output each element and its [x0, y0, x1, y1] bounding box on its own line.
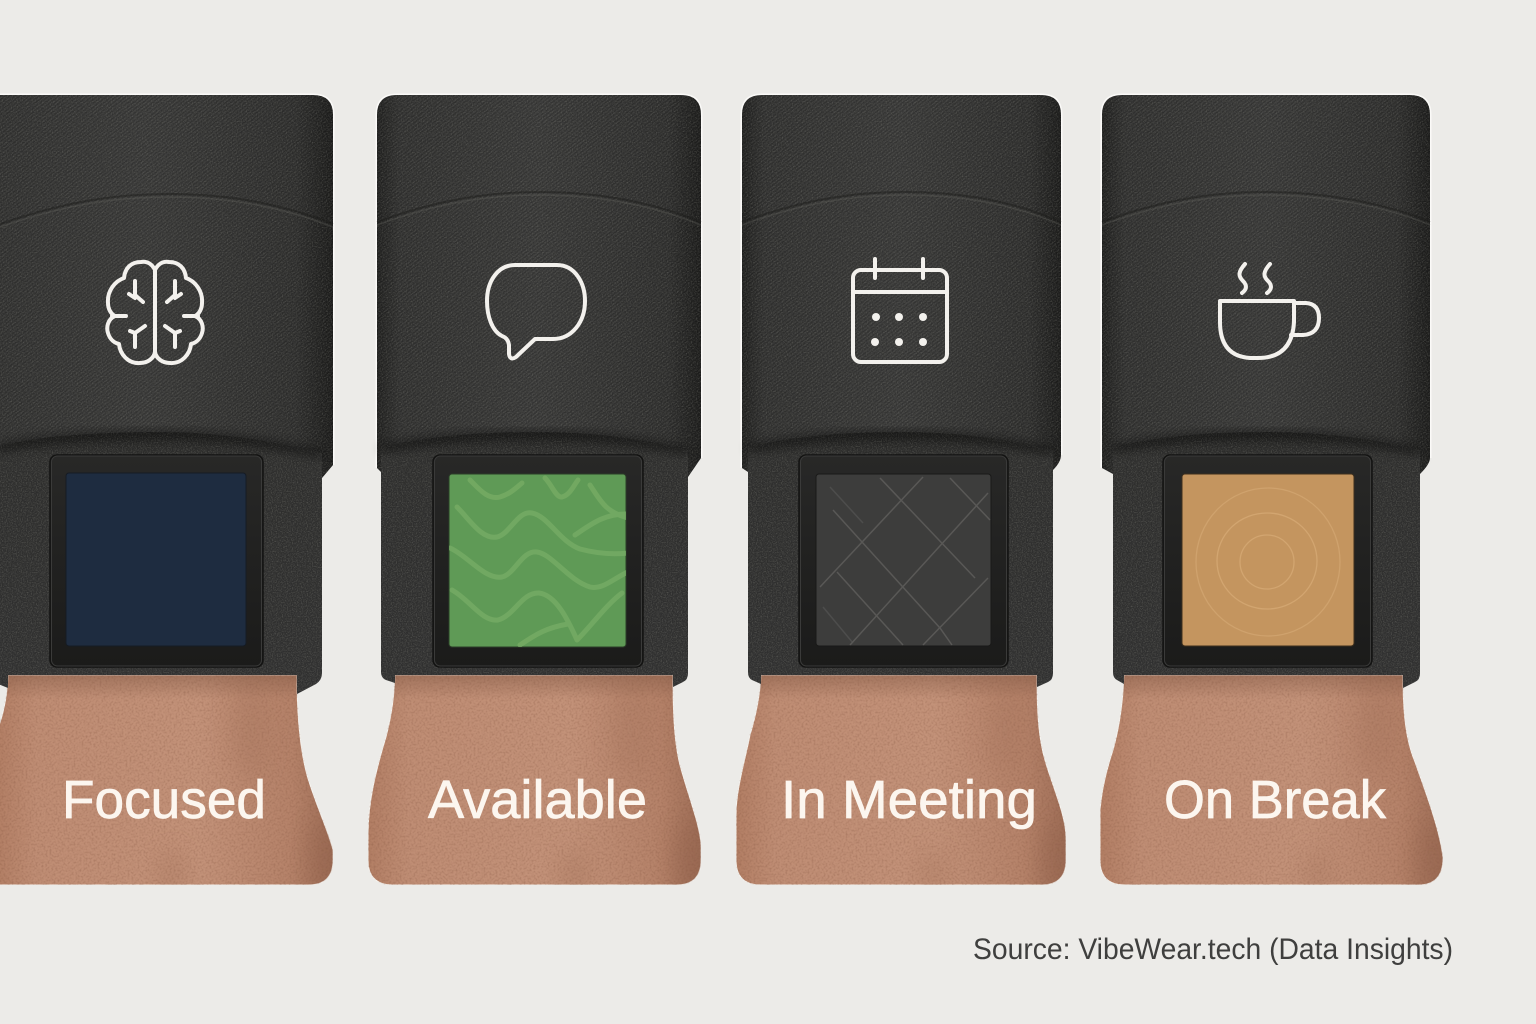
hand: available [368, 675, 708, 901]
label: On Break: On Break [1164, 770, 1387, 830]
screen: tan rings [1182, 474, 1354, 646]
panel: available [368, 95, 708, 901]
wristband: focused [0, 425, 322, 694]
status module: focused [50, 455, 263, 667]
hand: on break [1100, 675, 1448, 901]
screen: grey diamonds [816, 474, 991, 646]
status module: on break [1163, 455, 1372, 667]
status module: in meeting [799, 455, 1008, 667]
icon: coffee cup [1220, 264, 1319, 358]
sleeve cuff: focused [0, 95, 333, 478]
screen: green waves [449, 474, 628, 647]
wristband: on break [1113, 425, 1420, 688]
panel: on break [1100, 95, 1448, 901]
icon: speech bubble [487, 265, 585, 358]
wristband: in meeting [748, 425, 1053, 687]
icon: calendar [853, 259, 947, 362]
hand: focused [0, 675, 341, 901]
label: In Meeting: In Meeting [781, 770, 1037, 830]
panel: focused [0, 95, 341, 901]
hand: in meeting [736, 675, 1074, 901]
sleeve cuff: available [377, 95, 701, 477]
label: Focused: Focused [62, 770, 266, 830]
sleeve cuff: in meeting [742, 95, 1061, 472]
label: Available: Available [428, 770, 647, 830]
status module: available [433, 455, 643, 667]
screen: navy [66, 473, 246, 646]
source note: Source: VibeWear.tech (Data Insights) [973, 933, 1453, 966]
icon: brain [107, 262, 203, 363]
panel: in meeting [736, 95, 1074, 901]
sleeve cuff: on break [1102, 95, 1430, 474]
wristband: available [381, 425, 688, 687]
